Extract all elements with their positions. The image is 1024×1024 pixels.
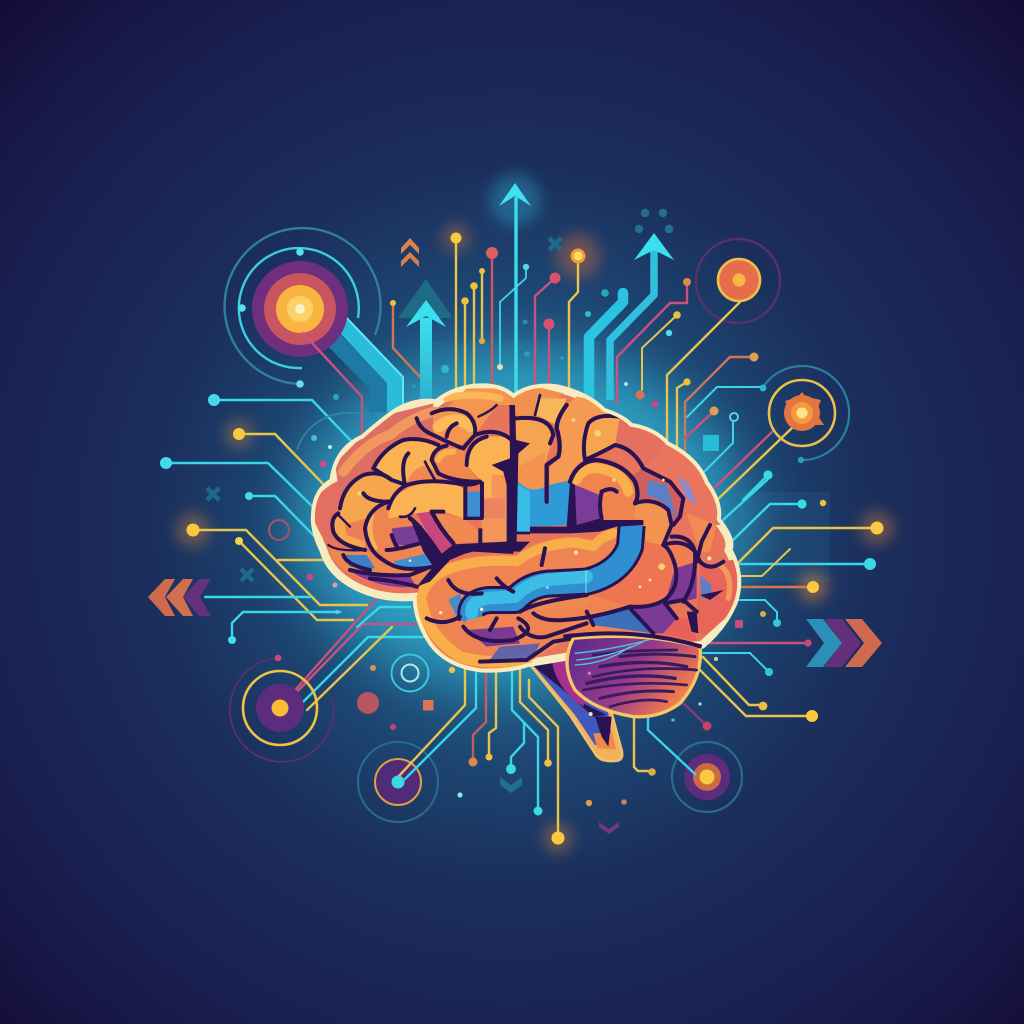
x marks: left [207, 488, 253, 581]
arrow: left up [398, 279, 453, 402]
brain: right lobes colour [510, 388, 723, 562]
target: right gear [760, 366, 849, 463]
circuit lines: upper right [677, 352, 793, 500]
brain: painted lobes [310, 388, 740, 669]
brain: left lobes colour [310, 388, 513, 587]
brain: cerebrum outline and base [315, 387, 737, 669]
brain: temporal sulci [427, 547, 587, 662]
target: bottom left [358, 665, 476, 822]
brain: blue fold [471, 525, 632, 618]
brain: lower right lobes colour [588, 542, 738, 642]
brain: temporal rim [422, 603, 527, 662]
brain: highlight dots [357, 418, 711, 614]
circuit lines: upper left [160, 333, 370, 542]
brain [310, 387, 740, 761]
big left band arrow [322, 311, 403, 412]
target: top left [225, 228, 381, 388]
small chevrons and marks: top [401, 209, 673, 267]
arrow: right up [589, 233, 674, 400]
brain: temporal lobe [417, 523, 647, 669]
brain: brainstem [527, 653, 622, 761]
small shapes: lower left [357, 654, 455, 730]
arrow: top center [489, 174, 541, 393]
faint horizontal panels [430, 342, 830, 582]
brain: cerebellum [563, 633, 702, 717]
target and lines: bottom right [634, 712, 742, 812]
circuit lines: lower left [176, 513, 423, 710]
circuit lines: bottom [457, 665, 627, 853]
target: top right [667, 239, 780, 442]
target: lower left [230, 655, 334, 762]
circuit lines: right [671, 480, 894, 730]
small chevrons: bottom [500, 777, 619, 834]
chevrons: right [806, 619, 882, 667]
brain: sulci right [510, 395, 724, 633]
circuit lines: top [390, 224, 691, 408]
chevrons: left [148, 579, 211, 616]
glow behind brain [295, 355, 745, 685]
brain: sulci left [328, 405, 530, 587]
